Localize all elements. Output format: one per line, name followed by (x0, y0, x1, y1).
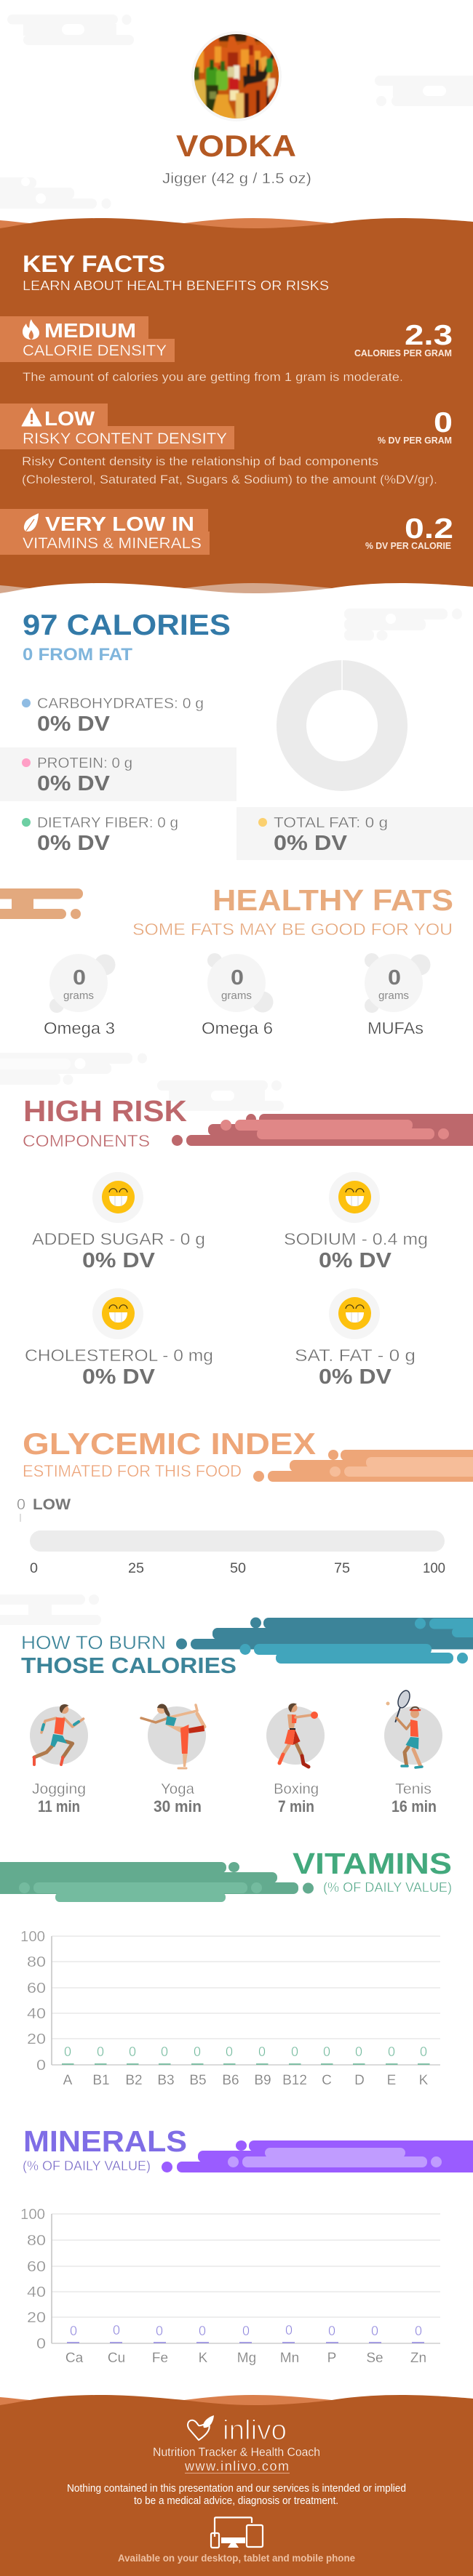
risk item: cholesterol: CHOLESTEROL - 0 mg (25, 1346, 213, 1365)
category labels (65, 2351, 426, 2366)
subheading: COMPONENTS (23, 1131, 150, 1150)
bars (62, 2063, 429, 2065)
website link: www.inlivo.com (184, 2459, 289, 2473)
decorative banner (253, 1450, 473, 1482)
scale labels: 50 (230, 1561, 246, 1576)
metric: omega 3: 0 (73, 966, 86, 990)
bottom wave (0, 583, 473, 605)
donut chart (291, 659, 393, 777)
decorative banner (0, 1862, 314, 1902)
subheading: LEARN ABOUT HEALTH BENEFITS OR RISKS (23, 278, 329, 293)
nutrient: protein (0, 747, 236, 801)
category labels: Fe (152, 2351, 168, 2366)
value marker: 0 (17, 1496, 25, 1513)
nutrient: carbohydrates: CARBOHYDRATES: 0 g (37, 696, 204, 712)
icon: runner (34, 1704, 84, 1765)
tagline: Nutrition Tracker & Health Coach (153, 2445, 320, 2459)
risk item: sodium: 0% DV (319, 1249, 392, 1272)
icon: tennis player (386, 1689, 422, 1768)
category labels: E (387, 2073, 396, 2088)
risk item: sodium: SODIUM - 0.4 mg (284, 1229, 428, 1248)
metric: omega 3 (44, 954, 115, 1038)
availability note: Available on your desktop, tablet and mobile phone (118, 2552, 355, 2564)
y axis labels: 0 (36, 2058, 46, 2074)
category labels: Mn (280, 2351, 299, 2366)
risk item: cholesterol: 0% DV (82, 1365, 156, 1389)
y axis labels: 40 (27, 2284, 46, 2300)
value labels: 0 (156, 2324, 163, 2338)
fact: calorie density: The amount of calories you are getting from 1 gram is moderate. (23, 371, 403, 384)
fact: risky content density: (Cholesterol, Saturated Fat, Sugars & Sodium) to the amount (%DV/gr). (22, 473, 437, 486)
activity: tennis (384, 1689, 442, 1815)
food photo: bottles (189, 29, 284, 124)
scale labels: 75 (334, 1561, 350, 1576)
category labels: K (419, 2073, 429, 2088)
panel: vitamins (0, 1847, 452, 2088)
fact: risky content density: RISKY CONTENT DENSITY (23, 430, 227, 447)
metric: omega 3: grams (63, 990, 94, 1002)
bar chart: vitamins (20, 1929, 440, 2088)
subheading: ESTIMATED FOR THIS FOOD (23, 1461, 242, 1480)
activity: yoga: Yoga (161, 1781, 195, 1797)
value labels (70, 2323, 422, 2338)
value labels: 0 (371, 2324, 378, 2338)
nutrient: total fat: TOTAL FAT: 0 g (274, 815, 388, 831)
fact: calorie density: 2.3 (405, 320, 453, 351)
footer wave (0, 2395, 473, 2417)
category labels: B5 (189, 2073, 207, 2088)
activity: jogging: 11 min (38, 1797, 80, 1815)
heading bold: THOSE CALORIES (21, 1653, 236, 1678)
activity: yoga: 30 min (154, 1797, 202, 1815)
value marker (17, 1496, 71, 1522)
value labels: 0 (113, 2323, 120, 2338)
nutrient: total fat (236, 807, 473, 860)
metric: omega 6: 0 (231, 966, 244, 990)
value labels: 0 (129, 2045, 136, 2059)
metric: MUFAs: 0 (388, 966, 401, 990)
y axis labels: 60 (27, 2259, 46, 2275)
scale labels: 25 (128, 1561, 144, 1576)
panel: key facts (0, 218, 473, 605)
panel: minerals (20, 2124, 473, 2366)
icon: leaf (24, 513, 39, 531)
background clouds (0, 1053, 284, 1111)
activity: tennis: 16 min (391, 1797, 437, 1815)
subheading: 0 FROM FAT (23, 645, 132, 665)
value labels: 0 (226, 2045, 233, 2059)
fact: calorie density: CALORIES PER GRAM (354, 348, 452, 358)
fact: vitamins and minerals: 0.2 (405, 513, 453, 545)
risk item: added sugar: ADDED SUGAR - 0 g (32, 1229, 205, 1248)
category labels: B6 (222, 2073, 239, 2088)
metric: MUFAs: MUFAs (367, 1019, 424, 1038)
fact: risky content density: Risky Content density is the relationship of bad components (22, 455, 378, 468)
activity: yoga (141, 1704, 206, 1815)
activity: boxing: Boxing (274, 1781, 319, 1797)
y axis labels (20, 1929, 46, 2074)
scale labels: 100 (423, 1561, 445, 1576)
risk item: sodium (284, 1172, 428, 1272)
icon: yoga pose (141, 1704, 204, 1768)
subheading: (% OF DAILY VALUE) (323, 1880, 452, 1895)
heading: HOW TO BURN (21, 1632, 166, 1653)
panel: footer (0, 2395, 473, 2576)
metric: omega 3: Omega 3 (44, 1019, 115, 1038)
value labels: 0 (323, 2045, 330, 2059)
icon: grinning face (329, 1172, 380, 1223)
fact: calorie density: CALORIE DENSITY (23, 342, 167, 359)
fact: calorie density: MEDIUM (44, 319, 136, 342)
icon: devices (211, 2517, 263, 2548)
panel: glycemic index (17, 1427, 473, 1576)
disclaimer: Nothing contained in this presentation and our services is intended or implied (67, 2483, 406, 2495)
value labels: 0 (64, 2045, 71, 2059)
heading: GLYCEMIC INDEX (23, 1427, 316, 1461)
fact: vitamins and minerals: % DV PER CALORIE (365, 541, 451, 551)
activity: jogging (30, 1704, 88, 1815)
icon: grinning face (329, 1288, 380, 1339)
scale bar (30, 1530, 445, 1552)
scale labels: 0 (30, 1561, 38, 1576)
value labels: 0 (258, 2045, 266, 2059)
disclaimer: to be a medical advice, diagnosis or treatment. (134, 2495, 338, 2507)
risk item: added sugar (32, 1172, 205, 1272)
icon: grinning face (92, 1172, 143, 1223)
category labels: Mg (237, 2351, 256, 2366)
y axis labels: 20 (27, 2310, 46, 2326)
y axis labels: 80 (27, 1954, 46, 1970)
y axis labels: 100 (20, 2207, 45, 2223)
metric: omega 6 (202, 953, 274, 1038)
metric: MUFAs (365, 953, 431, 1038)
subheading: (% OF DAILY VALUE) (23, 2159, 151, 2173)
category labels (63, 2073, 429, 2088)
risk item: cholesterol (25, 1288, 213, 1389)
y axis labels: 40 (27, 2006, 46, 2022)
panel: calories (0, 609, 473, 860)
value labels (64, 2045, 427, 2059)
value labels: 0 (242, 2324, 250, 2338)
value labels: 0 (97, 2045, 104, 2059)
decorative banner (162, 2140, 473, 2172)
value labels: 0 (388, 2045, 395, 2059)
value labels: 0 (420, 2045, 427, 2059)
category labels: A (63, 2073, 73, 2088)
heading: KEY FACTS (23, 251, 165, 277)
y axis labels: 60 (27, 1981, 46, 1997)
decorative banner (0, 888, 83, 919)
risk item: saturated fat: SAT. FAT - 0 g (295, 1346, 416, 1365)
fact: risky content density: LOW (44, 407, 95, 430)
value labels: 0 (415, 2324, 422, 2338)
panel: high risk components (0, 1053, 473, 1389)
category labels: B2 (125, 2073, 143, 2088)
activity: tennis: Tenis (395, 1781, 432, 1797)
heading: 97 CALORIES (23, 609, 231, 641)
category labels: D (354, 2073, 365, 2088)
fact: risky content density: % DV PER GRAM (378, 436, 452, 446)
disclaimer (67, 2483, 406, 2507)
category labels: C (322, 2073, 332, 2088)
value labels: 0 (194, 2045, 201, 2059)
category labels: Se (366, 2351, 383, 2366)
scale labels (30, 1561, 445, 1576)
category labels: B12 (282, 2073, 307, 2088)
subheading: SOME FATS MAY BE GOOD FOR YOU (132, 920, 453, 939)
decorative banner (172, 1114, 473, 1146)
value marker: LOW (33, 1496, 71, 1513)
y axis labels: 100 (20, 1929, 45, 1945)
icon: boxer (279, 1704, 318, 1767)
header panel (163, 31, 310, 186)
heading: HEALTHY FATS (212, 883, 453, 917)
category labels: Zn (410, 2351, 426, 2366)
nutrient: dietary fiber (22, 815, 178, 855)
background cloud left (0, 177, 111, 209)
nutrient: protein: PROTEIN: 0 g (37, 755, 132, 771)
activity: jogging: Jogging (32, 1781, 86, 1797)
category labels: Cu (108, 2351, 125, 2366)
nutrient: protein: 0% DV (37, 772, 111, 795)
fact: risky content density (0, 404, 453, 486)
heading: MINERALS (23, 2124, 187, 2158)
bar chart: minerals (20, 2207, 440, 2366)
category labels: P (327, 2351, 336, 2366)
background cloud (0, 1594, 101, 1625)
fact: calorie density (0, 316, 453, 384)
nutrient: dietary fiber: DIETARY FIBER: 0 g (37, 815, 178, 831)
category labels: Ca (65, 2351, 84, 2366)
activity: boxing: 7 min (278, 1797, 314, 1815)
category labels: B1 (92, 2073, 110, 2088)
activity: boxing (266, 1704, 325, 1815)
metric: omega 6: grams (221, 990, 252, 1002)
nutrient: total fat: 0% DV (274, 832, 348, 855)
decorative banner (176, 1617, 473, 1664)
nutrient: carbohydrates (22, 696, 204, 736)
value labels: 0 (285, 2323, 293, 2338)
value labels: 0 (70, 2324, 77, 2338)
nutrient: carbohydrates: 0% DV (37, 713, 111, 736)
background cloud top left (7, 15, 134, 45)
title: VODKA (176, 129, 296, 163)
bars (67, 2342, 424, 2343)
metric: omega 6: Omega 6 (202, 1019, 273, 1038)
category labels: B9 (254, 2073, 271, 2088)
logo: inlivo: inlivo (223, 2415, 287, 2446)
risk item: saturated fat (295, 1288, 416, 1389)
risk item: saturated fat: 0% DV (319, 1365, 392, 1389)
heading: HIGH RISK (23, 1094, 187, 1128)
y axis labels: 80 (27, 2233, 46, 2249)
y axis labels (20, 2207, 46, 2352)
metric: MUFAs: grams (378, 990, 409, 1002)
fact: vitamins and minerals (0, 509, 453, 555)
value labels: 0 (291, 2045, 298, 2059)
brown background (0, 233, 473, 593)
top wave (0, 218, 473, 240)
value labels: 0 (328, 2324, 335, 2338)
background cloud (344, 609, 462, 641)
y axis labels: 0 (36, 2336, 46, 2352)
risk item: added sugar: 0% DV (82, 1249, 156, 1272)
fact: risky content density: 0 (434, 407, 453, 438)
panel: healthy fats (0, 883, 453, 1038)
logo: inlivo (188, 2415, 287, 2446)
fact: vitamins and minerals: VITAMINS & MINERALS (23, 535, 202, 552)
heading: VITAMINS (293, 1847, 452, 1880)
nutrient: dietary fiber: 0% DV (37, 832, 111, 855)
panel: how to burn those calories (0, 1594, 473, 1815)
value labels: 0 (355, 2045, 362, 2059)
fact: vitamins and minerals: VERY LOW IN (45, 513, 194, 535)
category labels: K (199, 2351, 208, 2366)
icon: flame (23, 319, 39, 340)
category labels: B3 (157, 2073, 175, 2088)
serving size: Jigger (42 g / 1.5 oz) (162, 171, 311, 187)
value labels: 0 (161, 2045, 168, 2059)
value labels: 0 (199, 2324, 206, 2338)
icon: warning triangle (22, 408, 41, 426)
y axis labels: 20 (27, 2031, 46, 2047)
background cloud right (375, 76, 473, 106)
icon: grinning face (92, 1288, 143, 1339)
